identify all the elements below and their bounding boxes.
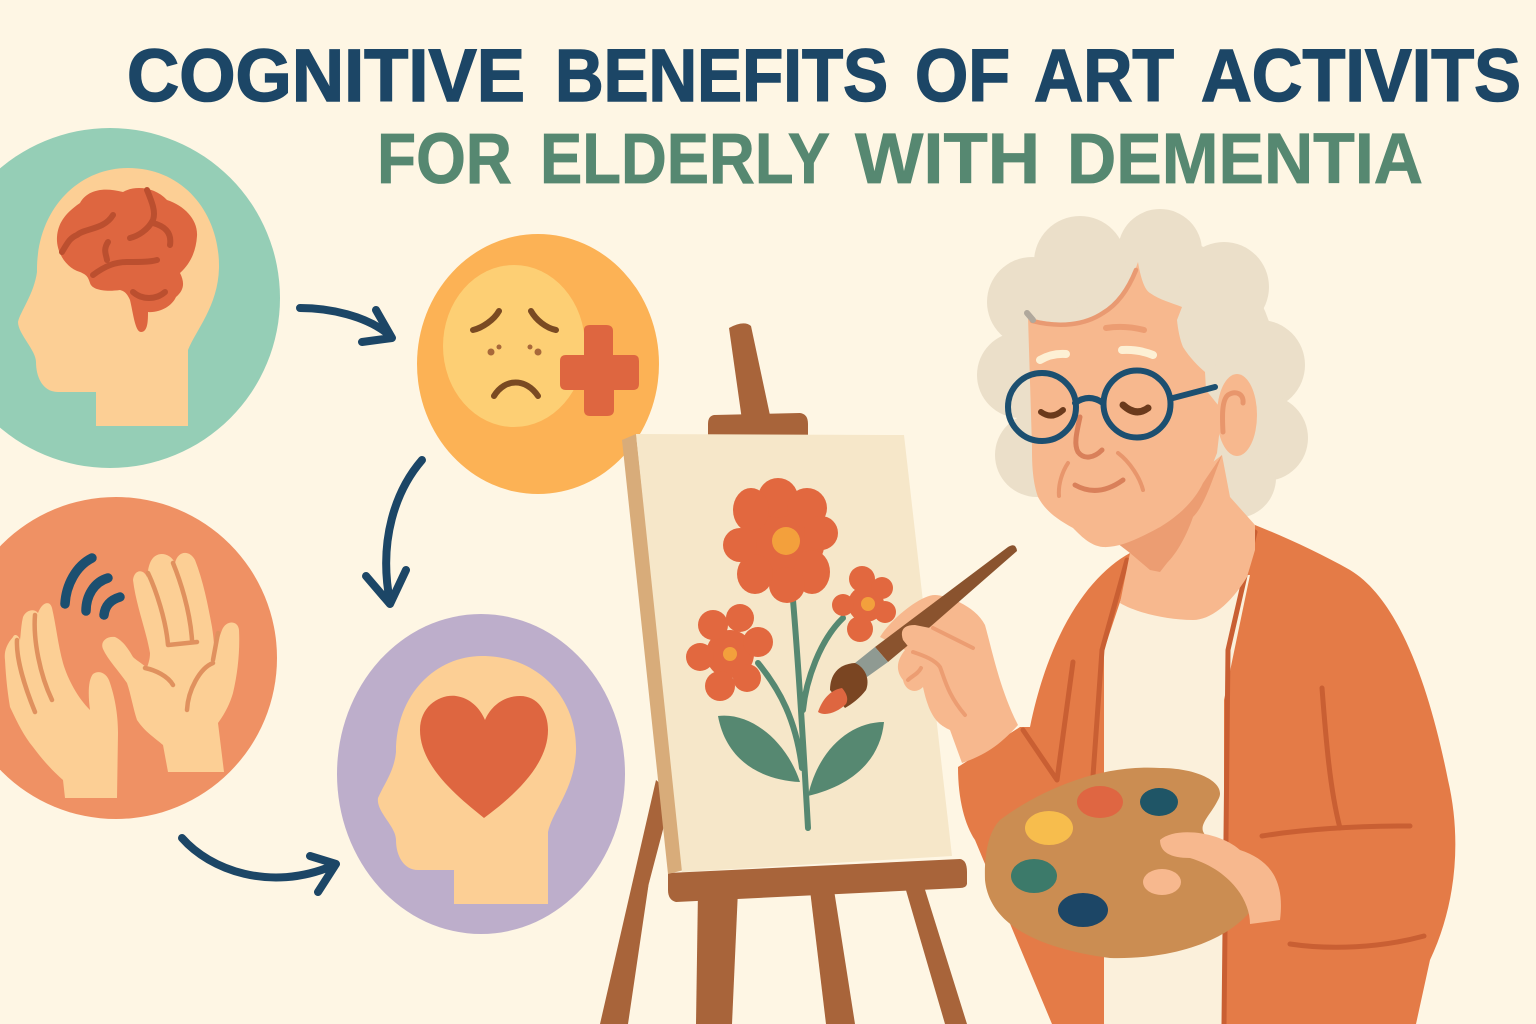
small left flower [686,604,773,701]
easel [600,323,967,1024]
figure: painting hand and brush [818,545,1018,763]
title: BENEFITS [555,34,888,117]
arrow: distress to calm [366,460,422,604]
icon: hands [0,497,277,819]
icon: heart in head [337,614,625,934]
title: FOR [377,120,512,199]
figure: palette [985,768,1281,958]
small right flower [832,566,896,642]
title: DEMENTIA [1067,120,1423,199]
title: ART [1034,34,1174,117]
title [127,34,1521,199]
title: ACTIVITS [1201,34,1521,117]
figure: face [1027,262,1257,547]
icon: brain in head [0,128,280,468]
arrow: brain to distress [300,308,392,342]
flower stems and leaves [718,600,884,828]
large red flower [723,478,838,603]
arrow: hands to calm [182,838,336,892]
title: OF [915,34,1010,117]
title: COGNITIVE [127,34,525,117]
figure: hair [977,209,1308,518]
icon: distressed face with plus [417,234,659,494]
figure: neck [1117,455,1255,620]
canvas with flower painting [622,434,952,874]
title: ELDERLY [540,120,830,199]
figure: glasses [1008,370,1215,441]
title: WITH [855,120,1040,199]
figure: cardigan [958,525,1455,1024]
